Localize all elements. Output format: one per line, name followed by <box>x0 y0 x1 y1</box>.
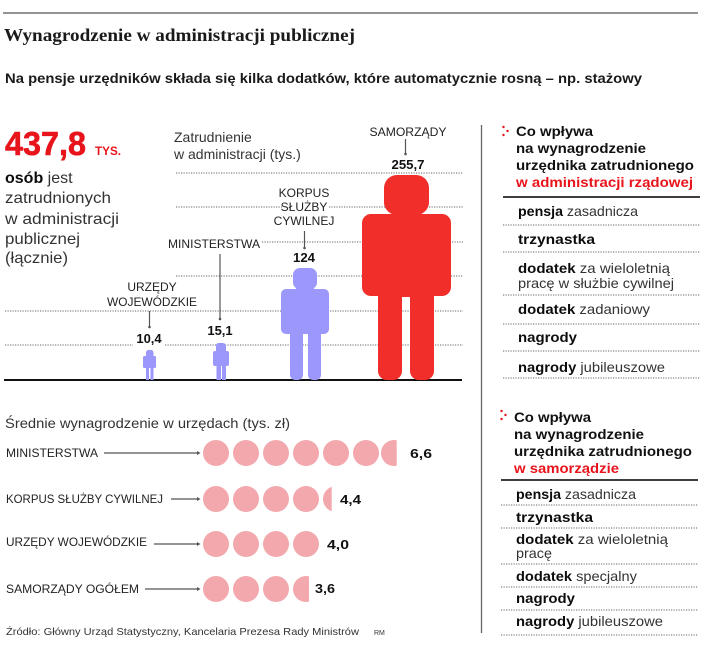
panel heading: Co wpływa <box>516 123 593 139</box>
list of pay components: pracę <box>516 545 552 561</box>
row: urzędy wojewódzkie: 4,0 <box>327 537 349 552</box>
list of pay components: dodatek zadaniowy <box>518 301 650 317</box>
row: samorządy ogółem: 3,6 <box>315 581 335 596</box>
list of pay components: pensja zasadnicza <box>518 203 638 219</box>
row: urzędy wojewódzkie: URZĘDY WOJEWÓDZKIE <box>6 534 147 549</box>
panel heading: urzędnika zatrudnionego <box>514 443 692 459</box>
list of pay components: trzynastka <box>516 509 593 525</box>
row: ministerstwa <box>6 440 432 466</box>
row: korpus służby cywilnej: KORPUS SŁUŻBY CYWILNEJ <box>6 492 163 506</box>
figure: urzędy wojewódzkie: 10,4 <box>136 331 162 346</box>
author initials: RM <box>374 630 385 637</box>
total employment callout: osób jest <box>5 170 73 187</box>
total employment callout: (łącznie) <box>5 250 68 267</box>
list of pay components: dodatek za wieloletnią <box>518 260 670 276</box>
figure: ministerstwa <box>168 237 260 380</box>
panel: local government <box>500 409 698 635</box>
row: ministerstwa: MINISTERSTWA <box>6 446 98 460</box>
icon: red dots <box>500 410 507 420</box>
panel heading <box>513 409 692 476</box>
figure: korpus służby cywilnej: KORPUS <box>279 186 329 200</box>
panel heading: na wynagrodzenie <box>516 140 646 156</box>
chart heading: Zatrudnienie <box>174 129 252 145</box>
source: Źródło: Główny Urząd Statystyczny, Kancelaria Prezesa Rady Ministrów <box>6 625 359 638</box>
list of pay components: nagrody <box>518 329 577 345</box>
total employment callout <box>4 125 121 267</box>
title: Wynagrodzenie w administracji publicznej <box>4 25 355 45</box>
panel heading: Co wpływa <box>514 409 591 425</box>
total employment callout: zatrudnionych <box>5 190 111 207</box>
row: korpus służby cywilnej: 4,4 <box>340 492 362 507</box>
row: urzędy wojewódzkie <box>6 531 349 557</box>
figure: korpus służby cywilnej: SŁUŻBY <box>281 200 327 214</box>
row: korpus służby cywilnej <box>6 486 362 512</box>
panel heading: urzędnika zatrudnionego <box>516 157 694 173</box>
list of pay components: pensja zasadnicza <box>516 486 636 502</box>
salary heading: Średnie wynagrodzenie w urzędach (tys. zł) <box>5 414 290 431</box>
figure: korpus służby cywilnej: CYWILNEJ <box>274 214 334 228</box>
list of pay components: pracę w służbie cywilnej <box>518 275 674 291</box>
row: samorządy ogółem <box>6 576 335 602</box>
figure: korpus służby cywilnej: 124 <box>293 250 316 265</box>
list of pay components <box>516 486 668 629</box>
figure: samorządy <box>362 125 451 380</box>
figure: samorządy: SAMORZĄDY <box>370 125 446 139</box>
panel heading: na wynagrodzenie <box>514 426 644 442</box>
figure: samorządy: 255,7 <box>392 157 424 172</box>
list of pay components: dodatek specjalny <box>516 568 637 584</box>
figure: urzędy wojewódzkie: URZĘDY <box>127 280 177 294</box>
figure: urzędy wojewódzkie <box>107 280 197 380</box>
list of pay components: nagrody jubileuszowe <box>518 359 665 375</box>
chart heading: w administracji (tys.) <box>173 146 301 162</box>
list of pay components <box>518 203 674 375</box>
row: samorządy ogółem: SAMORZĄDY OGÓŁEM <box>6 581 139 596</box>
list of pay components: nagrody <box>516 590 575 606</box>
total employment callout: w administracji <box>4 211 119 228</box>
total employment callout: TYS. <box>95 144 121 158</box>
icon: red dots <box>502 126 509 136</box>
list of pay components: trzynastka <box>518 231 595 247</box>
total employment callout: publicznej <box>5 231 80 248</box>
panel heading: w administracji rządowej <box>515 174 693 190</box>
figure: korpus służby cywilnej <box>274 186 334 380</box>
list of pay components: nagrody jubileuszowe <box>516 613 663 629</box>
panel heading <box>515 123 694 190</box>
figure: urzędy wojewódzkie: WOJEWÓDZKIE <box>107 294 197 309</box>
figure: ministerstwa: MINISTERSTWA <box>168 237 260 251</box>
baseline <box>4 379 462 381</box>
salary chart <box>5 414 432 602</box>
subtitle: Na pensje urzędników składa się kilka dodatków, które automatycznie rosną – np. stażowy <box>5 70 642 86</box>
row: ministerstwa: 6,6 <box>410 446 432 461</box>
panel: government administration <box>502 123 700 378</box>
employment chart <box>4 125 463 380</box>
list of pay components: dodatek za wieloletnią <box>516 531 668 547</box>
total employment callout: 437,8 <box>5 125 86 162</box>
panel heading: w samorządzie <box>513 460 619 476</box>
figure: ministerstwa: 15,1 <box>207 323 233 338</box>
